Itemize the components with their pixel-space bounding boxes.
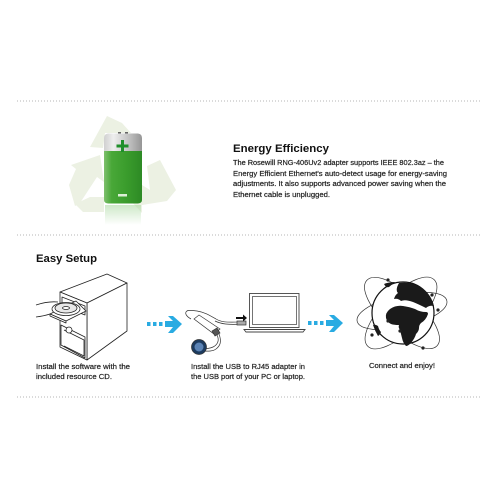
CD disc (192, 340, 206, 354)
icon: insertion arrow (236, 314, 247, 322)
text block: energy description: adjustments. It also supports advanced power saving when the (233, 181, 446, 188)
arrow: step 2 to 3 (308, 315, 343, 332)
text block: step 1: included resource CD. (36, 374, 112, 381)
heading: Easy Setup: Easy Setup (36, 253, 97, 265)
icon: computer tower with CD (36, 274, 127, 360)
CD tray (50, 301, 86, 321)
arrow: step 1 to 2 (147, 316, 182, 333)
text block: step 3: Connect and enjoy! (369, 363, 435, 370)
orbit nodes (370, 278, 440, 350)
text block: energy description (233, 160, 447, 199)
heading: Energy Efficiency: Energy Efficiency (233, 143, 330, 155)
hand (36, 302, 58, 317)
icon: laptop (244, 294, 305, 332)
icon: battery (104, 132, 142, 225)
plus sign (116, 140, 128, 152)
icon: USB adapter (186, 310, 246, 354)
text block: energy description: Energy Efficient Ethernet's auto-detect usage for energy-saving (233, 171, 447, 178)
text block: energy description: Ethernet cable is unplugged. (233, 192, 330, 199)
text block: energy description: The Rosewill RNG-406Uv2 adapter supports IEEE 802.3az – the (233, 160, 444, 167)
USB plug (237, 321, 246, 325)
text block: step 1: Install the software with the (36, 364, 130, 371)
icon: globe with orbits (354, 266, 450, 360)
dotted dividers (17, 101, 482, 397)
minus sign (118, 194, 127, 196)
battery reflection (105, 205, 141, 225)
continents (394, 283, 434, 308)
text block: step 2 (191, 364, 305, 381)
text block: step 2: Install the USB to RJ45 adapter in (191, 364, 305, 371)
text block: step 2: the USB port of your PC or laptop. (191, 374, 305, 381)
text block: step 1 (36, 364, 130, 381)
icon: recycling symbol (69, 116, 176, 213)
